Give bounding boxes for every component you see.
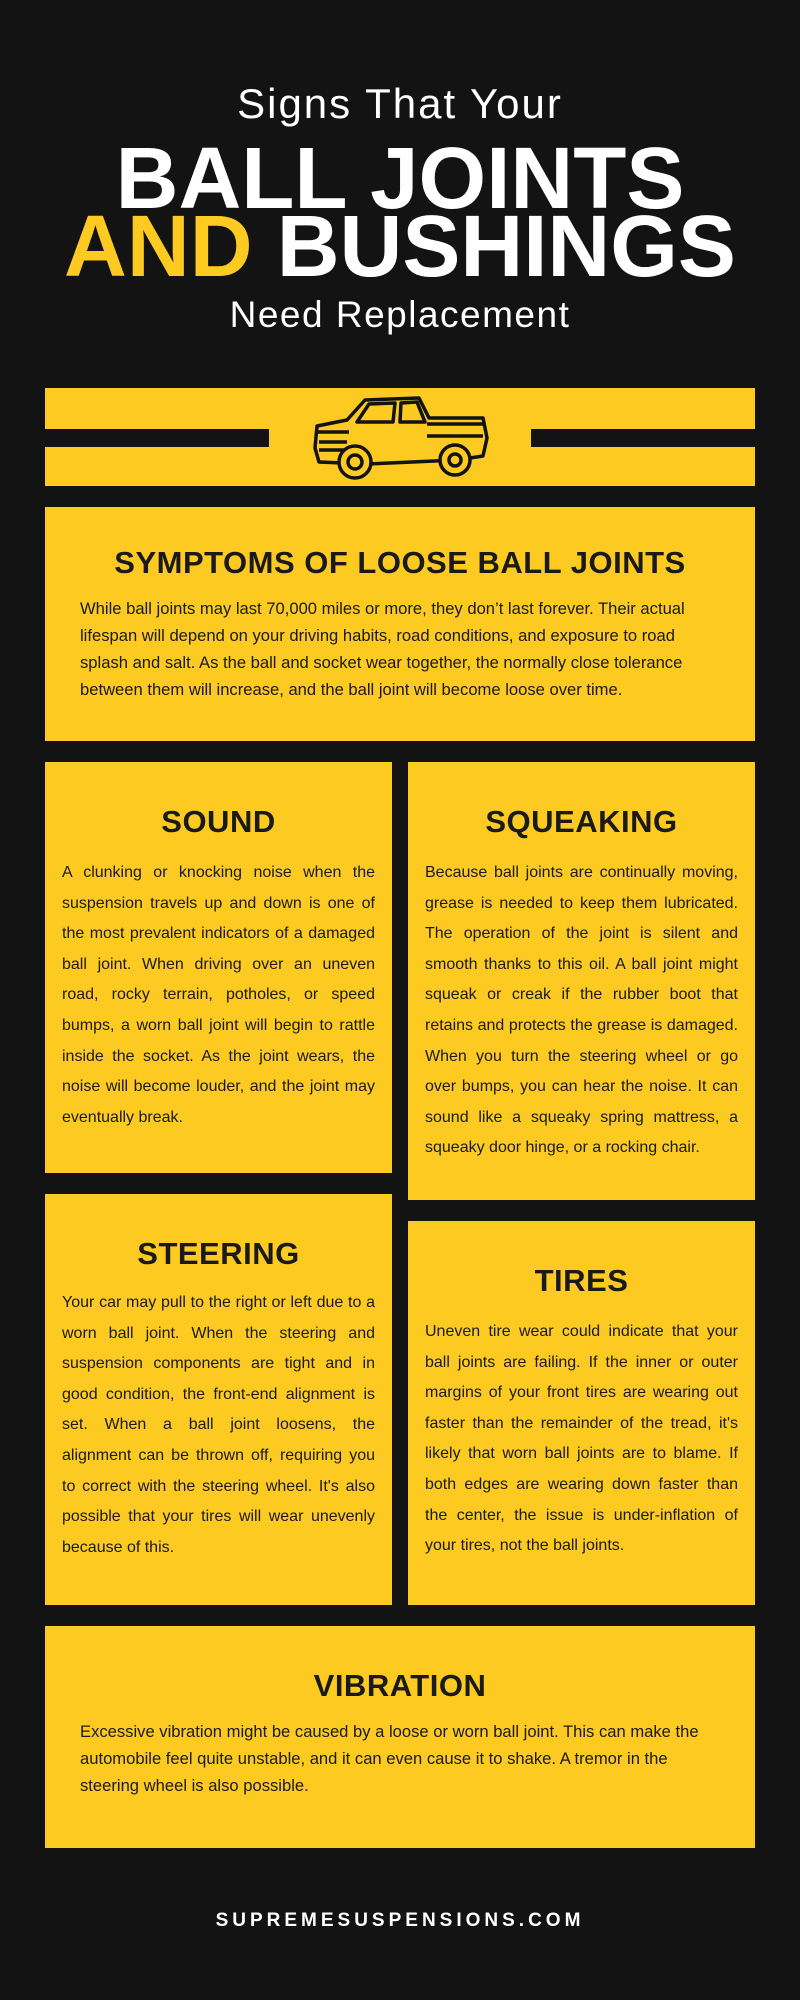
panel: symptoms of loose ball joints <box>45 507 755 741</box>
text block: While ball joints may last 70,000 miles or more, they don’t last forever. Their actual lifespan will depend on your driving habits, road conditions, and exposure to road splash and salt. As the ball and socket wear together, the normally close tolerance between them will increase, and the ball joint will become loose over time. <box>80 599 685 699</box>
panel: steering <box>45 1194 392 1605</box>
icon: pickup truck <box>313 396 489 480</box>
text block: Excessive vibration might be caused by a loose or worn ball joint. This can make the automobile feel quite unstable, and it can even cause it to shake. A tremor in the steering wheel is also possible. <box>80 1722 699 1795</box>
panel: squeaking <box>408 762 755 1200</box>
title line 3: AND BUSHINGS <box>64 198 736 295</box>
text block: Uneven tire wear could indicate that your ball joints are failing. If the inner or outer margins of your front tires are wearing out faster than the remainder of the tread, it's likely that worn ball joints are to blame. If both edges are wearing down faster than the center, the issue is under-inflation of your tires, not the ball joints. <box>425 1323 738 1554</box>
footer: SUPREMESUSPENSIONS.COM <box>216 1910 584 1931</box>
heading: STEERING <box>137 1236 300 1271</box>
text block: Because ball joints are continually moving, grease is needed to keep them lubricated. The operation of the joint is silent and smooth thanks to this oil. A ball joint might squeak or creak if the rubber boot that retains and protects the grease is damaged. When you turn the steering wheel or go over bumps, you can hear the noise. It can sound like a squeaky spring mattress, a squeaky door hinge, or a rocking chair. <box>425 864 738 1156</box>
text block: Your car may pull to the right or left due to a worn ball joint. When the steering and suspension components are tight and in good condition, the front-end alignment is set. When a ball joint loosens, the alignment can be thrown off, requiring you to correct with the steering wheel. It's also possible that your tires will wear unevenly because of this. <box>62 1294 375 1556</box>
panel: vibration <box>45 1626 755 1848</box>
text block: A clunking or knocking noise when the suspension travels up and down is one of the most prevalent indicators of a damaged ball joint. When driving over an uneven road, rocky terrain, potholes, or speed bumps, a worn ball joint will begin to rattle inside the socket. As the joint wears, the noise will become louder, and the joint may eventually break. <box>62 864 375 1126</box>
panel: tires <box>408 1221 755 1605</box>
truck banner <box>45 388 755 486</box>
heading: TIRES <box>535 1263 628 1298</box>
heading: SYMPTOMS OF LOOSE BALL JOINTS <box>114 545 686 580</box>
heading: SQUEAKING <box>485 804 678 839</box>
title line 4: Need Replacement <box>230 294 570 335</box>
title line 1: Signs That Your <box>237 80 563 127</box>
heading: SOUND <box>161 804 276 839</box>
heading: VIBRATION <box>314 1668 486 1703</box>
title <box>64 80 736 335</box>
title line 2: BALL JOINTS <box>116 130 684 227</box>
panel: sound <box>45 762 392 1173</box>
